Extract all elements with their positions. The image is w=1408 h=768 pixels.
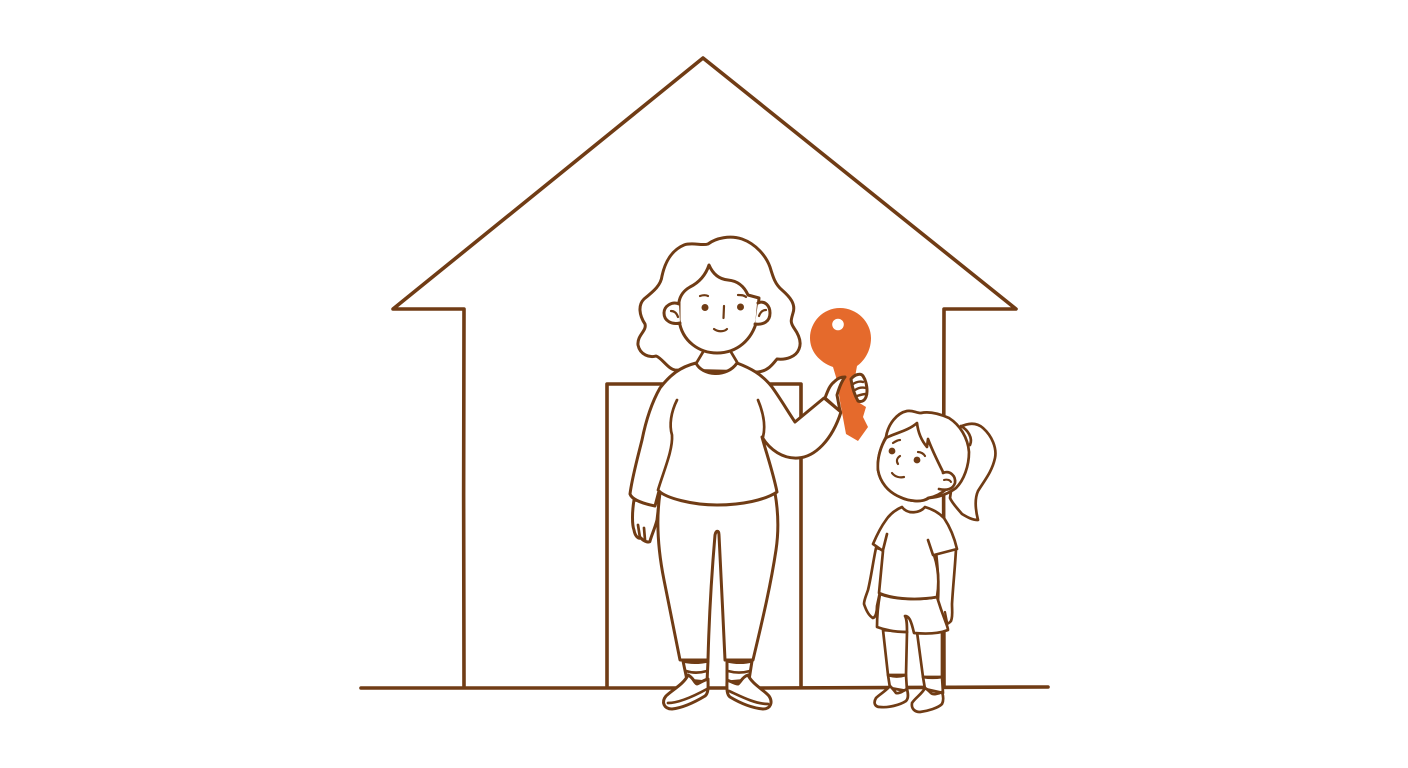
woman ears <box>664 303 680 324</box>
ground line <box>361 687 1048 688</box>
woman neck <box>697 352 737 362</box>
girl arms <box>864 548 884 618</box>
woman hair <box>638 237 800 372</box>
woman legs <box>658 493 778 660</box>
door <box>607 384 801 686</box>
woman left hand <box>632 500 659 542</box>
woman eyes, brows, nose, mouth <box>702 304 708 311</box>
house outline <box>393 58 1016 686</box>
girl ponytail <box>950 424 995 520</box>
woman socks <box>683 661 708 682</box>
woman figure <box>630 237 871 709</box>
girl legs <box>883 630 907 675</box>
girl head and hair <box>878 411 969 501</box>
girl shirt <box>873 507 957 599</box>
girl eyes, brows, nose, mouth <box>889 448 895 454</box>
girl shorts <box>877 594 948 634</box>
key <box>810 308 871 441</box>
woman sweater and arms <box>630 363 841 506</box>
girl socks <box>888 675 907 691</box>
woman shoes <box>664 675 708 709</box>
girl ear <box>939 472 955 490</box>
girl shoes <box>875 686 908 707</box>
woman gripping hand <box>825 374 867 411</box>
girl figure <box>864 411 995 712</box>
woman face <box>679 265 759 353</box>
